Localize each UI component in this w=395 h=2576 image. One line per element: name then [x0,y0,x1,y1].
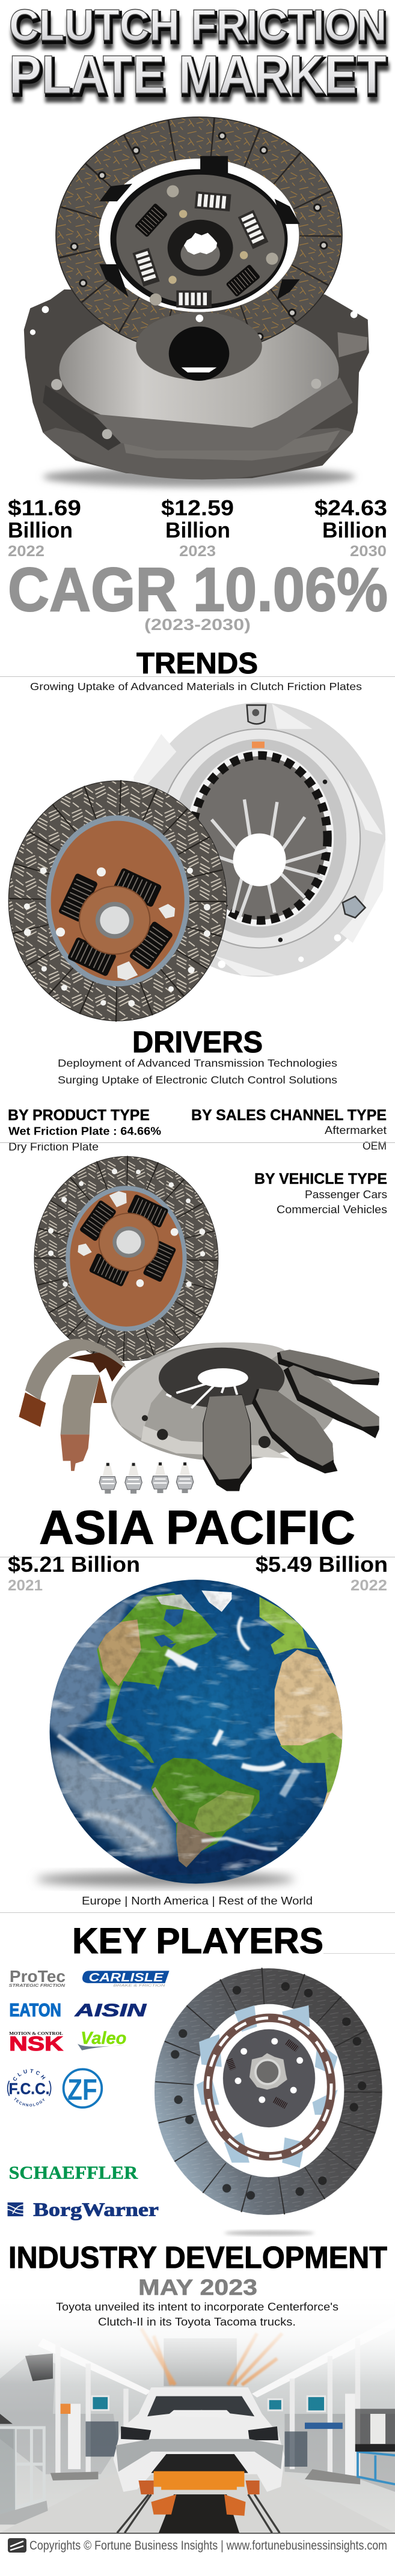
logo: NSK: MOTION & CONTROL [9,2031,63,2036]
segment: by sales channel type: OEM [363,1140,387,1152]
brake friction disc [155,1968,382,2215]
heading: key players: KEY PLAYERS [72,1921,323,1961]
pressure plate [111,1342,337,1461]
market value 2030: Billion [322,518,387,542]
north america [97,1593,217,1763]
CAGR figure: (2023-2030) [144,616,251,634]
segment: by vehicle type: Commercial Vehicles [277,1204,387,1216]
hero image: clutch disc and pressure plate [24,117,369,487]
logo: Carlisle [82,1971,170,1987]
market value 2023 [161,496,234,560]
logo: ProTec: ProTec [10,1967,66,1986]
other regions: Europe | North America | Rest of the World [82,1895,313,1907]
market value 2023: 2023 [179,543,216,560]
logo: Schaeffler: SCHAEFFLER [9,2163,138,2183]
drivers text: Deployment of Advanced Transmission Technologies [58,1057,337,1069]
development text: Toyota unveiled its intent to incorporate Centerforce's [56,2300,338,2313]
pressure plate [133,703,385,977]
development text: Clutch-II in its Toyota Tacoma trucks. [98,2315,296,2328]
logo: Carlisle: CARLISLE [88,1971,164,1984]
brake shoes [19,1339,126,1471]
regional value 2021: 2021 [8,1577,43,1594]
icon: fortune logo [8,2538,26,2553]
drivers text: Surging Uptake of Electronic Clutch Control Solutions [58,1074,337,1086]
drivers text [58,1057,337,1086]
regional value 2022: $5.49 Billion [256,1552,388,1577]
factory photo [0,2327,395,2533]
market value 2022: 2022 [8,543,44,560]
floor [1,2527,394,2533]
heading: trends: TRENDS [136,647,258,680]
segment: by product type: BY PRODUCT TYPE [8,1107,150,1124]
orange subframe [138,2471,260,2516]
spark plugs [99,1462,194,1494]
logo: FCC: CLUTCH [13,2068,46,2080]
logo: BorgWarner: BorgWarner [33,2199,159,2220]
market value 2022: $11.69 [8,496,81,520]
greenland [201,1590,231,1612]
market value 2022: Billion [8,518,73,542]
segment: by sales channel type: Aftermarket [325,1124,387,1136]
south america [151,1758,260,1867]
logo: Eaton: EATON [10,2000,61,2020]
clutch kit image: pressure plate and disc [8,703,385,1021]
market value 2030: $24.63 [314,496,387,520]
title [9,1,388,113]
clouds left [48,1597,282,1875]
market value 2022 [8,496,81,560]
left cage [0,2426,46,2474]
key players logos [7,1967,170,2109]
globe [48,1579,345,1885]
logo: ZF: ZF [67,2073,97,2106]
segment: by vehicle type [254,1171,387,1216]
cloud layer [48,1579,345,1885]
heading: industry development: INDUSTRY DEVELOPMENT [8,2240,387,2274]
regional value 2022 [256,1552,388,1594]
logo: FCC [7,2068,52,2107]
segment: by vehicle type: Passenger Cars [305,1189,387,1201]
car body [114,2387,284,2492]
release bearing [136,312,262,381]
segment: by sales channel type: BY SALES CHANNEL TYPE [191,1107,387,1124]
logo: FCC: TECHNOLOGY [14,2097,44,2107]
regional value 2021 [8,1552,140,1594]
date: MAY 2023 [138,2275,257,2300]
segment: by vehicle type: BY VEHICLE TYPE [254,1171,387,1187]
logo: ProTec: STRATEGIC FRICTION [9,1983,66,1988]
surface texture [48,1579,345,1885]
heading: asia pacific: ASIA PACIFIC [39,1500,355,1554]
segment: by product type: Wet Friction Plate : 64.66% [8,1124,161,1138]
sparks [141,2329,282,2385]
development text [56,2300,338,2328]
logo: NSK: NSK [9,2033,63,2055]
auto parts image: disc, brake shoes, pressure plate, pads, spark plugs [19,1157,379,1494]
market value 2030: 2030 [350,543,387,560]
regional value 2021: $5.21 Billion [8,1552,140,1577]
logo: BorgWarner [8,2199,159,2220]
monitors [92,2396,325,2411]
segment: by sales channel type [191,1107,387,1152]
friction disc [34,1157,218,1360]
market value 2023: Billion [165,518,230,542]
segment: by product type: Dry Friction Plate [8,1141,99,1153]
segment: by product type [8,1107,161,1153]
factory background [41,2347,355,2398]
trends text: Growing Uptake of Advanced Materials in Clutch Friction Plates [30,680,362,692]
logo: Aisin: AISIN [74,2001,147,2020]
logos continued [8,2163,159,2220]
blue cart [357,2452,395,2484]
logo: FCC: F.C.C. [9,2079,50,2097]
clutch friction disc [56,117,342,354]
fade [0,2299,395,2385]
atlantic clouds [167,1617,297,1849]
friction disc [8,781,227,1021]
market value 2023: $12.59 [161,496,234,520]
brake pads [203,1350,379,1491]
africa and europe [260,1596,343,1808]
heading: drivers: DRIVERS [132,1025,263,1059]
logo: Valeo: Valeo [81,2029,126,2048]
market value 2030 [314,496,387,560]
regional value 2022: 2022 [351,1577,387,1594]
globe shadow [36,1872,295,1887]
logo: Carlisle: BRAKE & FRICTION [114,1984,165,1987]
